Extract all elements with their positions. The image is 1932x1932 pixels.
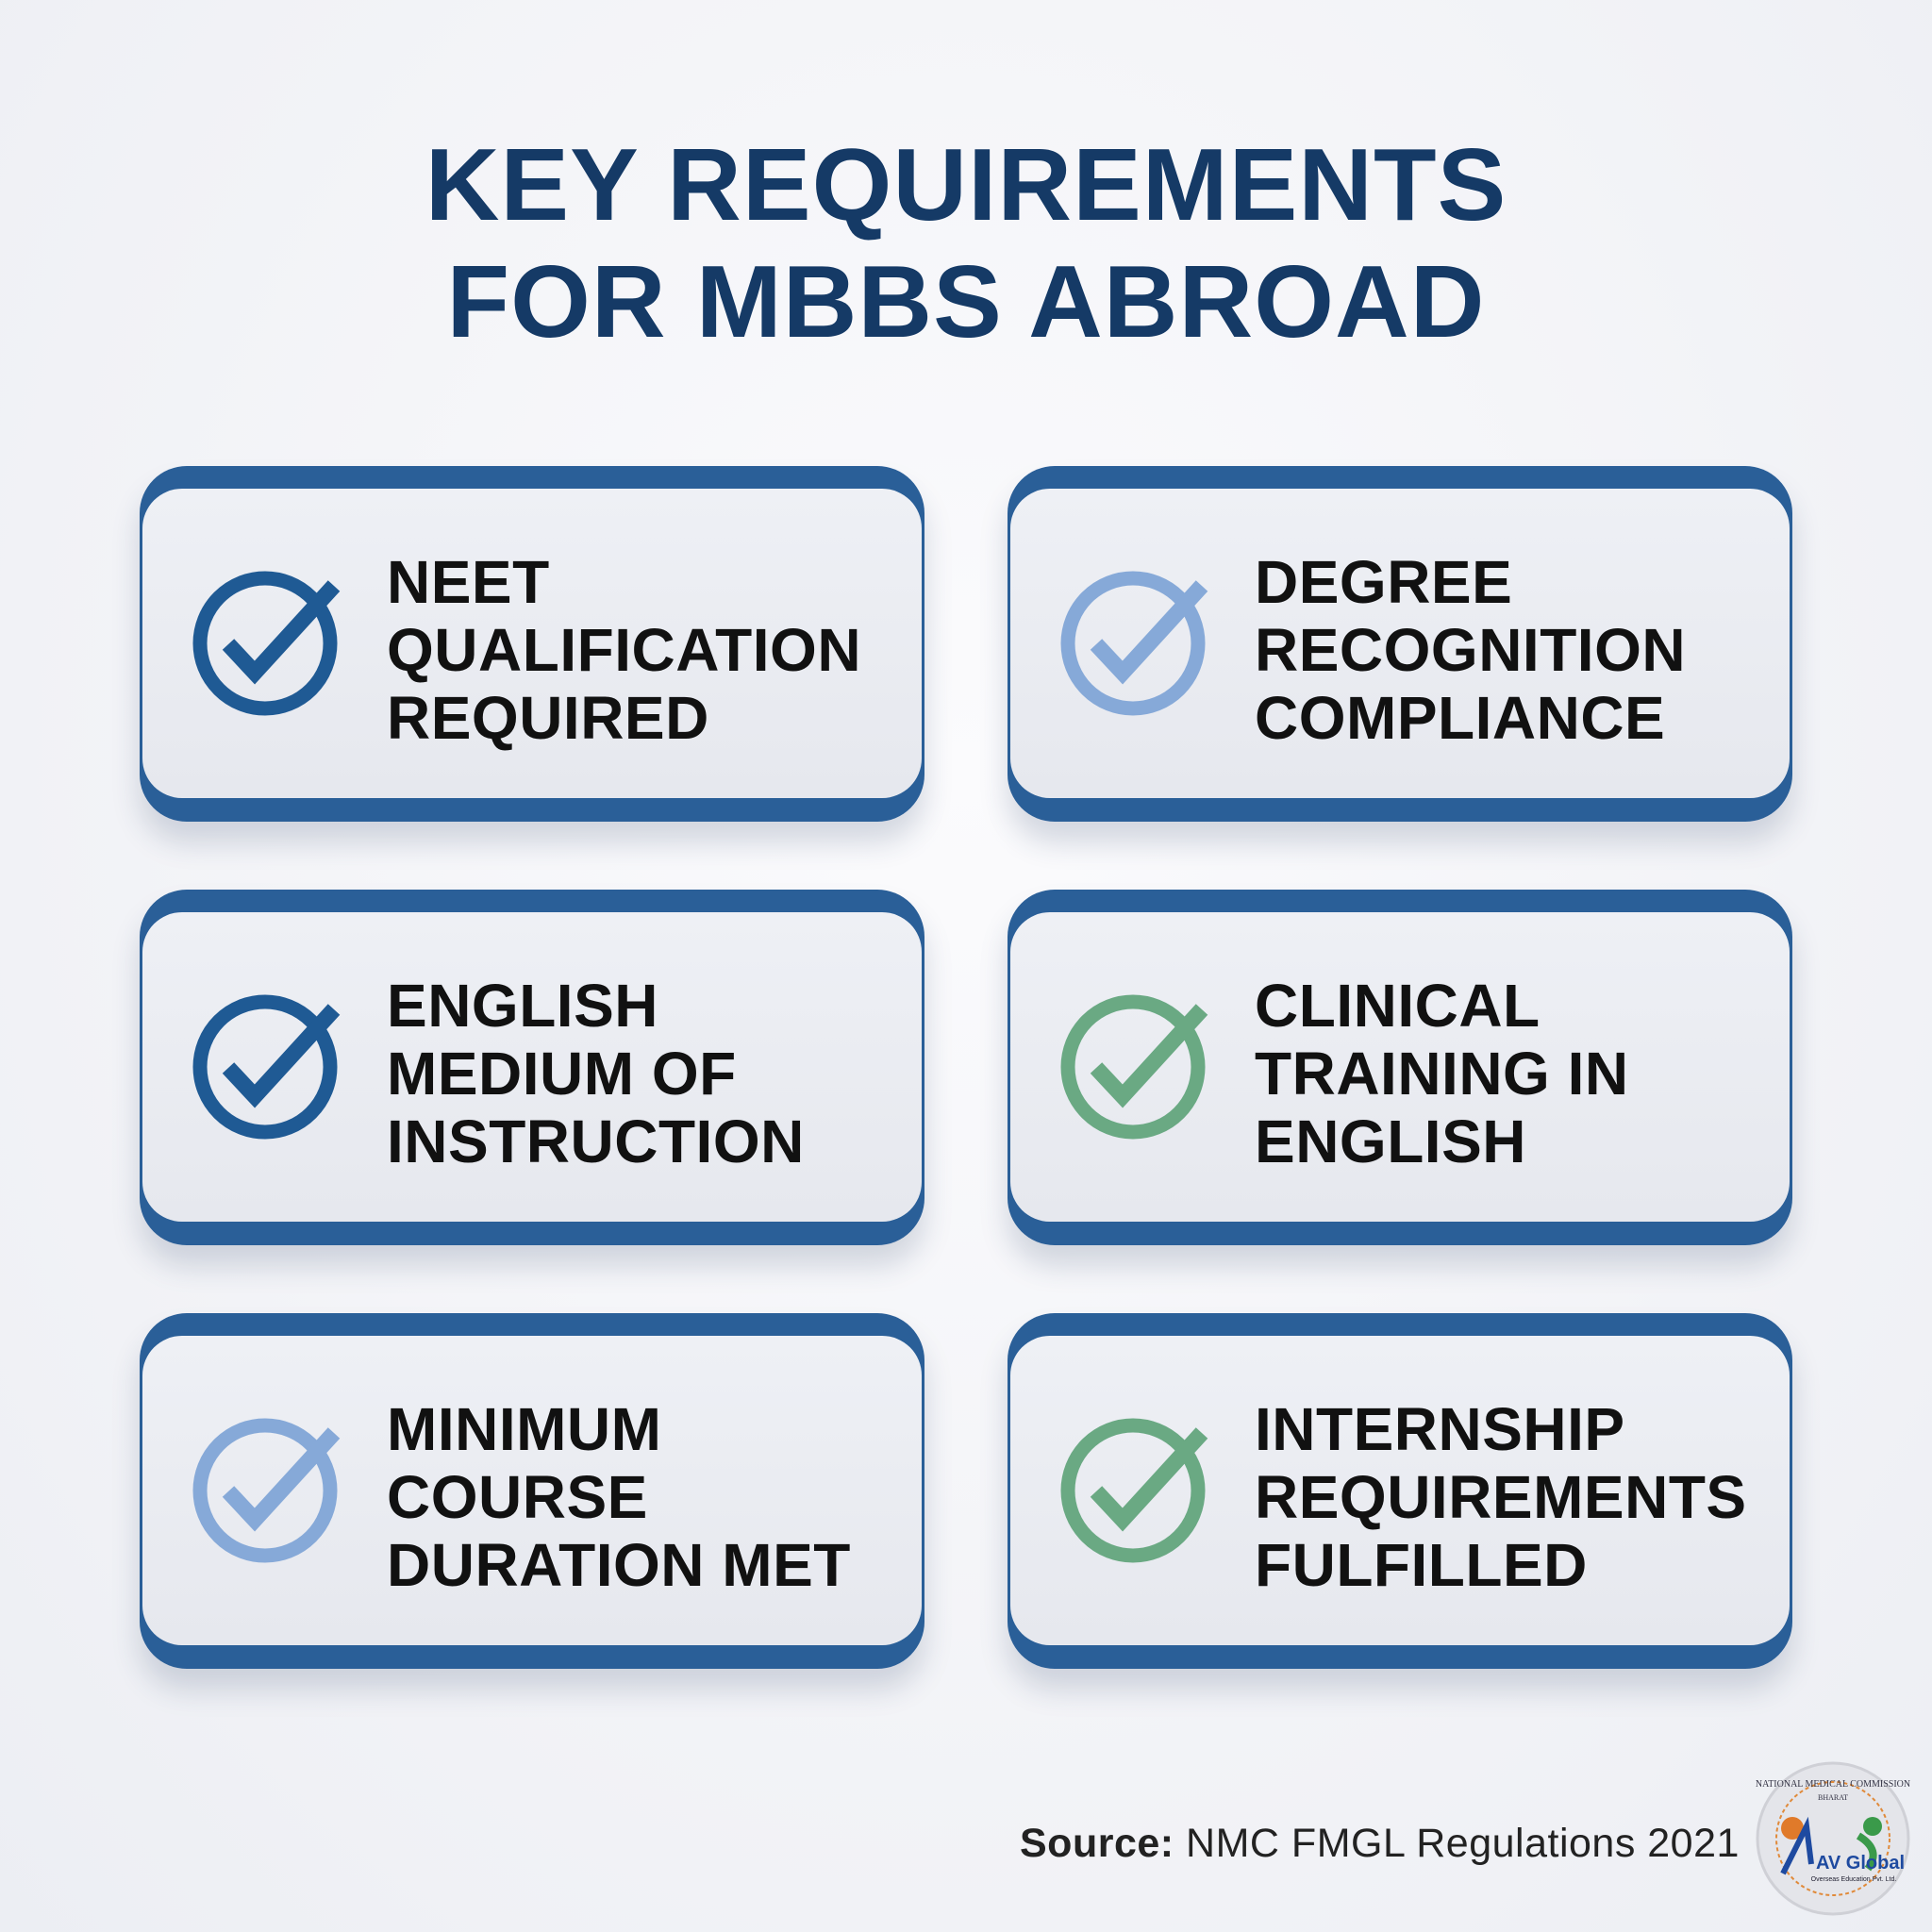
text: DURATION MET [387, 1531, 851, 1599]
text: REQUIRED [387, 684, 709, 752]
text [1255, 972, 1629, 1175]
text: QUALIFICATION [387, 616, 861, 684]
panel: internship [1008, 1313, 1792, 1669]
title [425, 127, 1507, 359]
logo: AV Global [1816, 1853, 1905, 1874]
text: CLINICAL [1255, 972, 1541, 1040]
icon: check dark blue [192, 994, 340, 1140]
text: ENGLISH [1255, 1108, 1526, 1175]
text [1255, 1395, 1747, 1599]
text: COURSE [387, 1463, 648, 1531]
logo: NATIONAL MEDICAL COMMISSION [1756, 1779, 1910, 1790]
text: REQUIREMENTS [1255, 1463, 1747, 1531]
panel: clinical [1008, 890, 1792, 1245]
title: KEY REQUIREMENTS [425, 127, 1507, 242]
title: FOR MBBS ABROAD [447, 244, 1485, 359]
panel: duration [140, 1313, 924, 1669]
text: INTERNSHIP [1255, 1395, 1625, 1463]
text: NEET [387, 548, 550, 616]
text: MEDIUM OF [387, 1040, 737, 1108]
text: INSTRUCTION [387, 1108, 805, 1175]
icon: check green [1060, 994, 1208, 1140]
icon: check green [1060, 1419, 1208, 1562]
logo [1756, 1762, 1910, 1915]
text [1255, 548, 1686, 752]
text [387, 972, 805, 1175]
text [387, 548, 861, 752]
panel: english [140, 890, 924, 1245]
panel: degree [1008, 466, 1792, 822]
text: RECOGNITION [1255, 616, 1686, 684]
logo: BHARAT [1818, 1793, 1848, 1802]
text: MINIMUM [387, 1395, 661, 1463]
text [387, 1395, 851, 1599]
icon: check dark blue [192, 572, 340, 715]
source text: Source: NMC FMGL Regulations 2021 [1020, 1821, 1740, 1866]
icon: check light blue [192, 1419, 340, 1562]
logo: Overseas Education Pvt. Ltd. [1811, 1876, 1896, 1883]
text: ENGLISH [387, 972, 658, 1040]
text: FULFILLED [1255, 1531, 1588, 1599]
panel: NEET [140, 466, 924, 822]
text: TRAINING IN [1255, 1040, 1629, 1108]
icon: check light blue [1060, 572, 1208, 715]
text: COMPLIANCE [1255, 684, 1665, 752]
text: DEGREE [1255, 548, 1512, 616]
